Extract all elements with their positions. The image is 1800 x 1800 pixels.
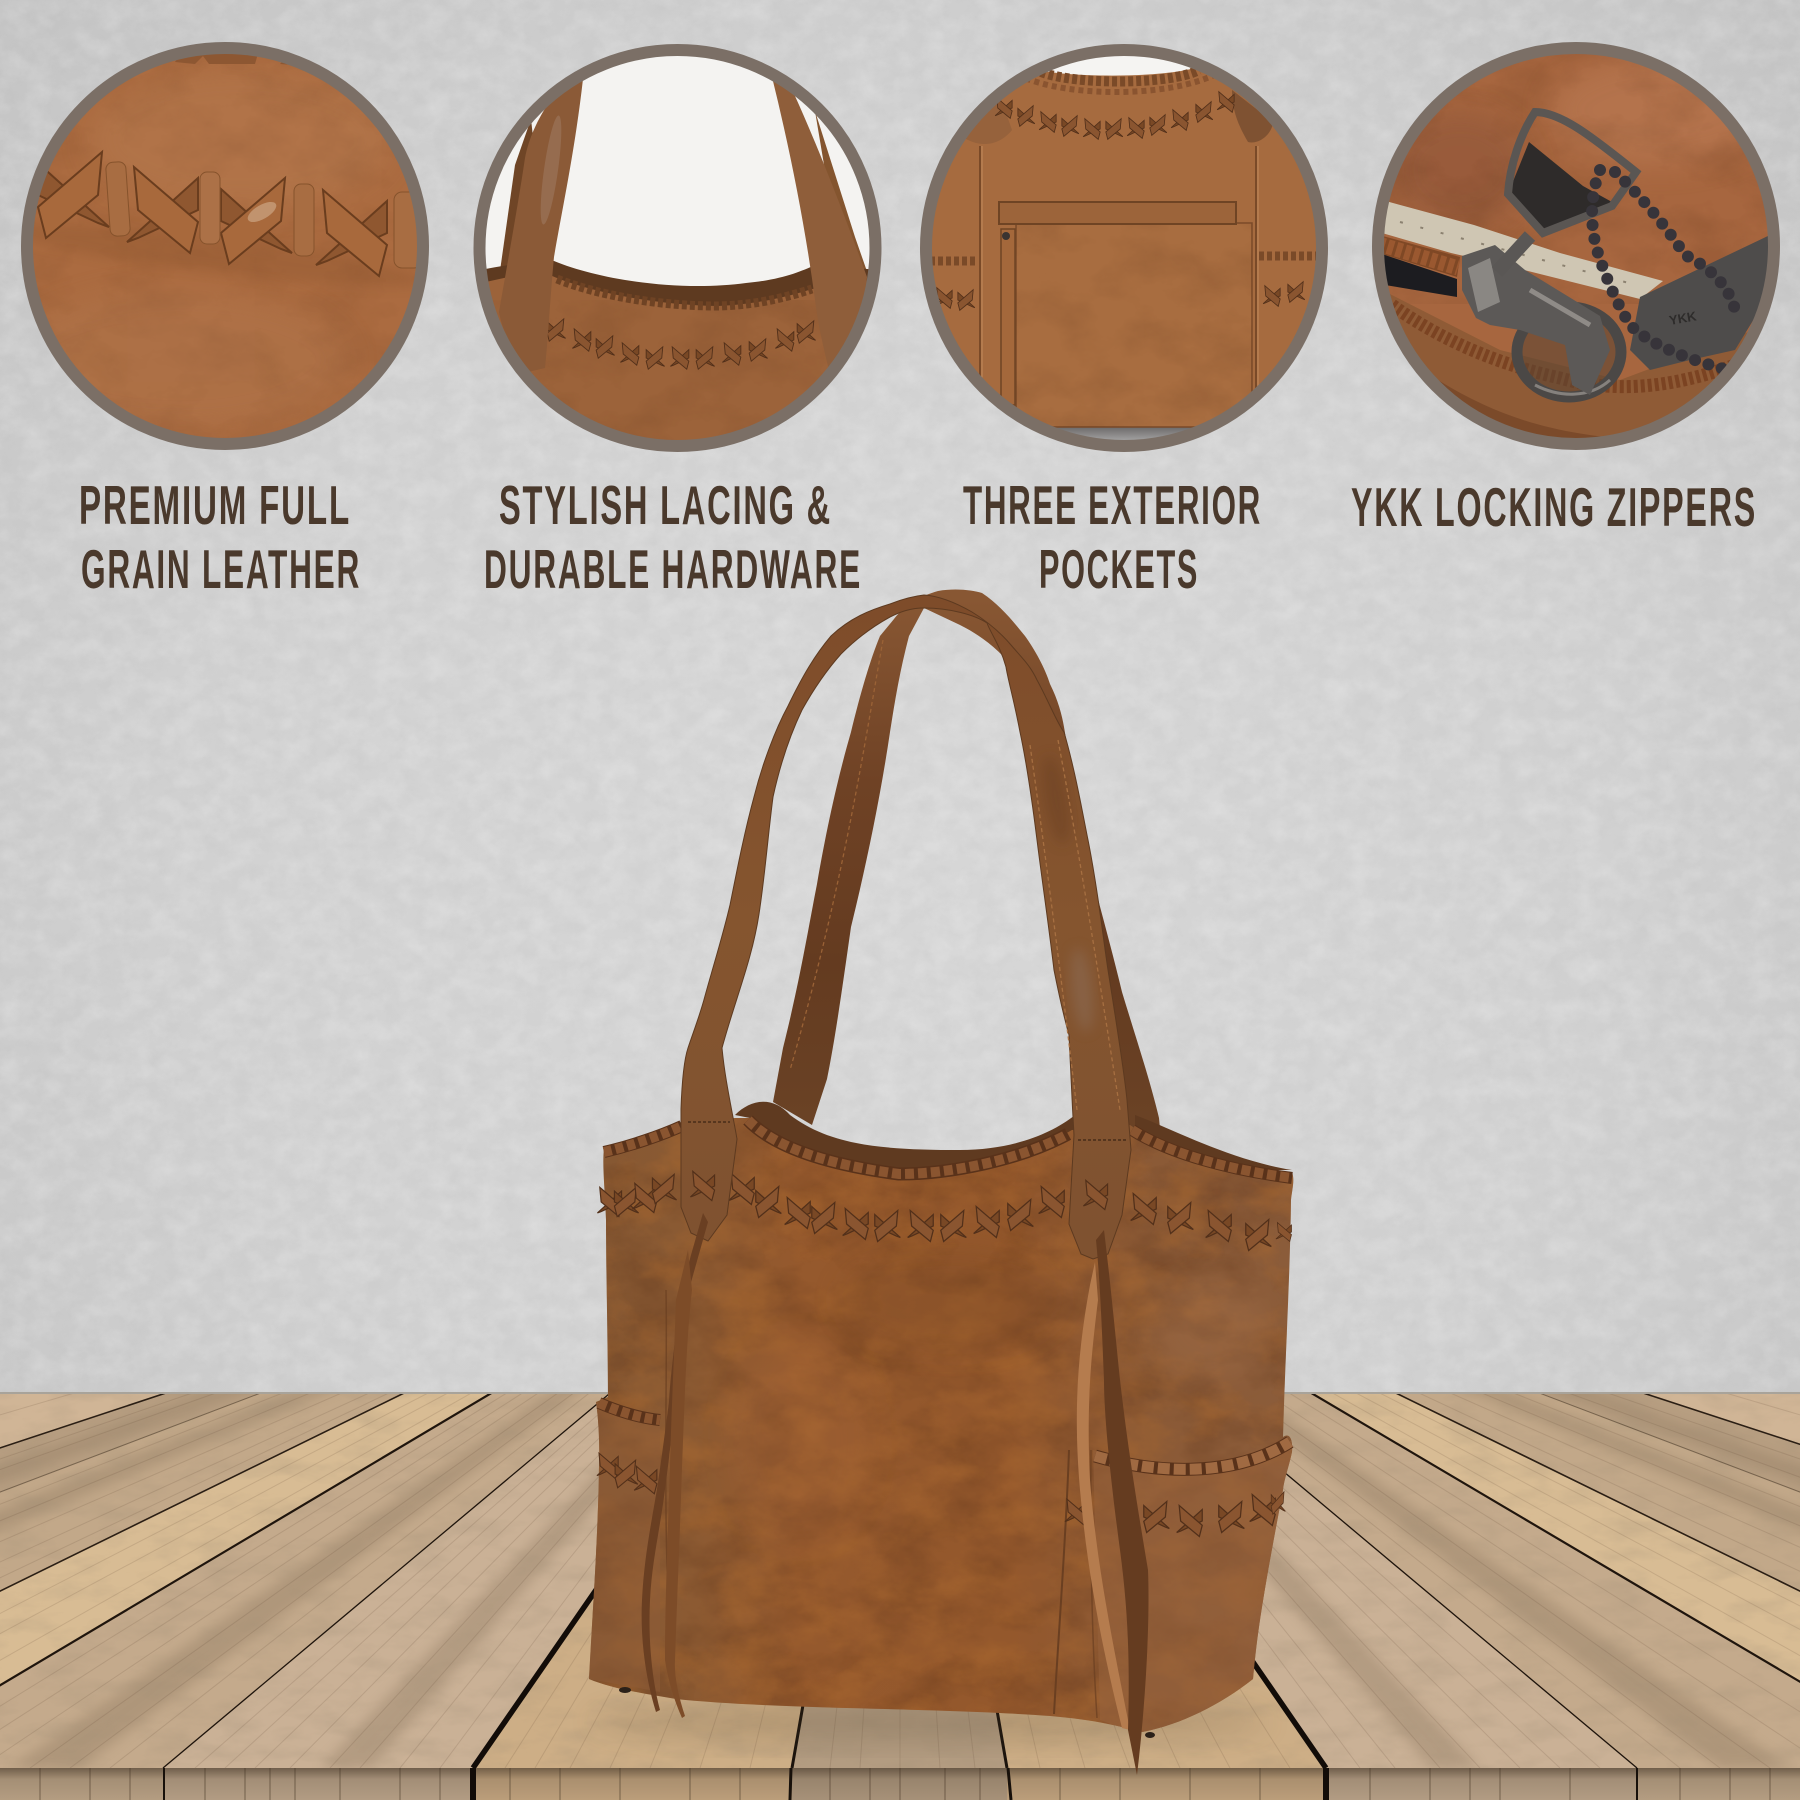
back handle [773, 590, 1162, 1150]
heading: premium full grain leather [79, 474, 361, 600]
lacing row [597, 1174, 1291, 1250]
leather tote bag [580, 590, 1300, 1775]
wall background [0, 0, 1800, 1400]
heading: three exterior pockets [963, 474, 1262, 600]
wooden table top [0, 1392, 1800, 1768]
left tassel [642, 1213, 708, 1718]
icon: feature circle 1, leather close-up [4, 40, 430, 452]
table front edge [0, 1768, 1800, 1800]
bag body [580, 1110, 1300, 1740]
bag feet [619, 1687, 1155, 1738]
front handle [681, 595, 1131, 1259]
heading: premium full grain leather: PREMIUM FULL [79, 474, 351, 536]
interior back rim [735, 1102, 1292, 1175]
icon: feature circle 3, exterior pocket [920, 44, 1340, 457]
heading: three exterior pockets: THREE EXTERIOR [963, 474, 1262, 536]
left side pocket panel [589, 1402, 660, 1692]
icon: feature circle 4, YKK locking zipper: YKK [1668, 308, 1698, 328]
side pocket lacing [597, 1403, 1290, 1536]
heading: premium full grain leather: GRAIN LEATHER [81, 538, 361, 600]
icon: feature circle 2, lacing and straps [472, 44, 884, 460]
heading: stylish lacing and durable hardware: DURABLE HARDWARE [484, 538, 862, 600]
heading: three exterior pockets: POCKETS [1039, 538, 1199, 600]
bag shadow on table [590, 1702, 1270, 1742]
heading: stylish lacing and durable hardware [484, 474, 862, 600]
right tassel [1077, 1230, 1149, 1775]
top rim lacing [604, 1120, 1292, 1178]
heading: stylish lacing and durable hardware: STYLISH LACING & [499, 474, 832, 536]
icon: feature circle 4, YKK locking zipper [1374, 44, 1790, 470]
right side pocket panel [1093, 1440, 1292, 1735]
